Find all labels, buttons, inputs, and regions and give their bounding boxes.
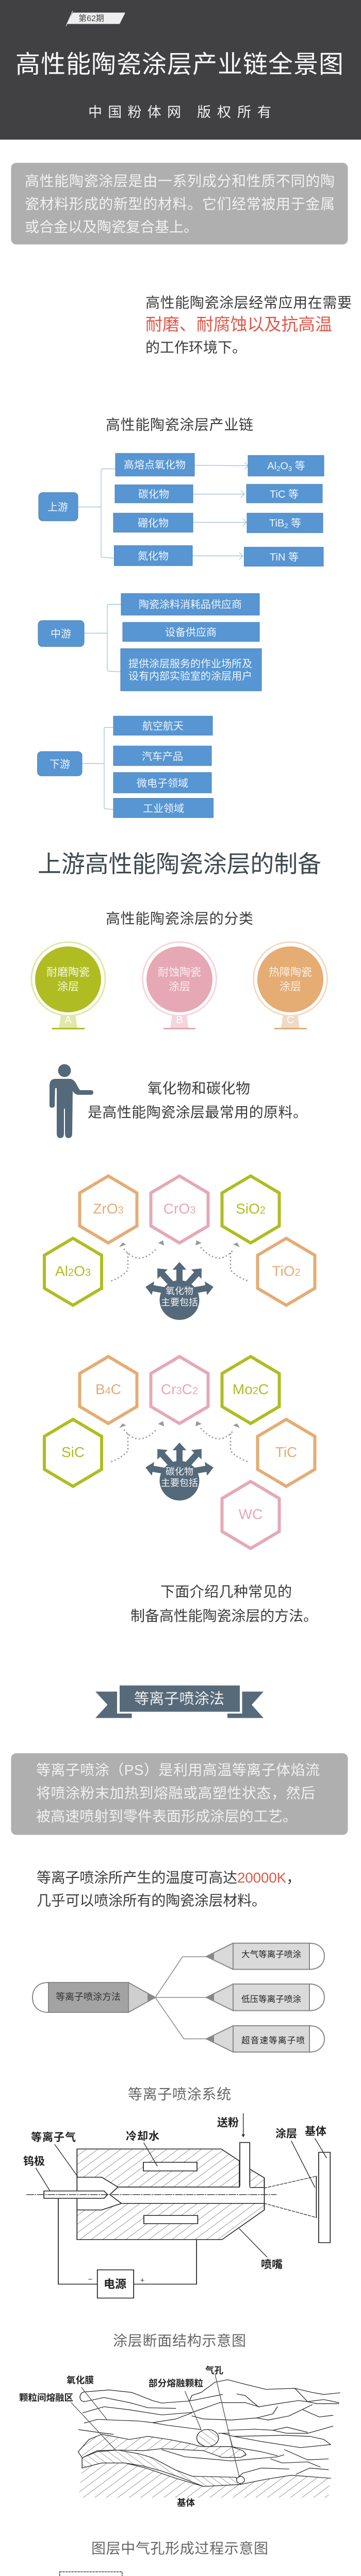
badge: corrosion-resistant: B xyxy=(176,1014,183,1026)
TiB2: 2 xyxy=(284,522,288,530)
plasma spraying panel: 等离子喷涂（PS）是利用高温等离子体焰流 xyxy=(36,1762,320,1778)
subtitle: 中国粉体网 xyxy=(88,105,181,120)
TiN xyxy=(244,547,323,566)
TiC xyxy=(247,484,322,503)
hex Al2O3: Al2O3 xyxy=(55,1263,91,1279)
consumable supplier: 陶瓷涂料消耗品供应商 xyxy=(139,599,242,611)
connectors xyxy=(84,604,121,672)
diagram: pore formation xyxy=(11,2572,350,2576)
midstream node xyxy=(38,620,84,647)
badge: thermal barrier: 涂层 xyxy=(280,981,301,993)
hex SiC: SiC xyxy=(61,1444,85,1460)
boride: 硼化物 xyxy=(138,517,169,529)
diagram: plasma spray system: 冷却水 xyxy=(126,2131,159,2142)
diagram: plasma spray system: 钨极 xyxy=(23,2156,45,2167)
Al2O3: 3 xyxy=(288,465,292,472)
hex Cr3C2 xyxy=(151,1357,208,1423)
hex Cr3C2: Cr3C2 xyxy=(161,1381,198,1397)
node: low pressure xyxy=(206,1984,324,2011)
intro panel: 高性能陶瓷涂层是由一系列成分和性质不同的陶 xyxy=(25,173,335,189)
oxide xyxy=(116,453,194,476)
midstream node: 中游 xyxy=(51,628,71,640)
badge: wear-resistant: 耐磨陶瓷 xyxy=(46,967,90,978)
TiB2: TiB xyxy=(269,518,284,529)
badge: thermal barrier xyxy=(254,942,327,1029)
plasma spraying panel: 被高速喷射到零件表面形成涂层的工艺。 xyxy=(36,1808,297,1824)
hex TiO2 xyxy=(258,1239,315,1306)
automotive: 汽车产品 xyxy=(142,751,183,762)
Al2O3: 2 xyxy=(276,465,280,472)
diagram: plasma spray system: 电源 xyxy=(104,2278,126,2291)
hex TiC: TiC xyxy=(275,1444,297,1460)
badge: wear-resistant: 涂层 xyxy=(57,981,79,993)
diagram: coating cross-section: 部分熔融颗粒 xyxy=(149,2378,203,2388)
hub: oxides: 主要包括 xyxy=(161,1297,198,1308)
hex B4C: B4C xyxy=(95,1381,121,1397)
diagram: plasma spray system xyxy=(23,2113,330,2298)
hex Mo2C: Mo2C xyxy=(233,1381,269,1397)
oxide hexagons xyxy=(44,1176,315,1320)
issue tag xyxy=(66,11,125,26)
raw materials text: 是高性能陶瓷涂层最常用的原料。 xyxy=(88,1105,307,1120)
coating service xyxy=(121,649,261,691)
industrial: 工业领域 xyxy=(143,803,184,815)
hex WC xyxy=(222,1482,280,1549)
Al2O3: Al xyxy=(267,461,276,472)
hub: oxides: 氧化物 xyxy=(166,1286,193,1296)
equipment supplier: 设备供应商 xyxy=(165,626,217,638)
badge: corrosion-resistant: 耐蚀陶瓷 xyxy=(158,967,201,978)
carbide: 碳化物 xyxy=(138,488,169,500)
consumable supplier xyxy=(121,594,259,615)
intro panel: 或合金以及陶瓷复合基上。 xyxy=(25,219,198,235)
application text: 耐磨、耐腐蚀以及抗高温 xyxy=(145,315,332,334)
method intro text xyxy=(130,1584,318,1624)
carbide xyxy=(115,485,193,503)
hex TiC xyxy=(258,1419,315,1486)
downstream node: 下游 xyxy=(50,758,70,770)
upstream node: 上游 xyxy=(47,501,68,513)
diagram: plasma spray system: 送粉 xyxy=(217,2117,239,2129)
hex SiC xyxy=(44,1419,102,1486)
Al2O3: O xyxy=(280,461,288,472)
ribbon: plasma spraying: 等离子喷涂法 xyxy=(134,1690,224,1707)
node: atmospheric: 大气等离子喷涂 xyxy=(241,1950,301,1959)
diagram: coating cross-section: 氧化膜 xyxy=(67,2375,94,2385)
diagram: coating cross-section: 气孔 xyxy=(205,2365,223,2376)
diagram: plasma spray system: − xyxy=(88,2275,93,2284)
chart: upstream xyxy=(39,453,324,566)
hex SiO2: SiO2 xyxy=(236,1200,266,1217)
TiB2 xyxy=(247,513,323,533)
TiN: TiN 等 xyxy=(270,551,299,563)
industrial xyxy=(113,799,214,818)
microelectronics: 微电子领域 xyxy=(137,777,188,789)
main node xyxy=(32,1982,155,2012)
method intro text: 下面介绍几种常见的 xyxy=(160,1584,292,1600)
automotive xyxy=(113,746,211,766)
badge: thermal barrier: C xyxy=(287,1014,294,1026)
hex Mo2C xyxy=(222,1357,280,1423)
TiB2: 等 xyxy=(288,517,301,529)
diagram: plasma spray system: 喷嘴 xyxy=(261,2259,283,2271)
node: supersonic xyxy=(206,2026,324,2052)
hub: oxides xyxy=(144,1262,215,1320)
heading: coating cross-section: 涂层断面结构示意图 xyxy=(113,2333,246,2349)
diagram: plasma spray system: 涂层 xyxy=(275,2128,297,2140)
diagram: plasma spray system: 等离子气 xyxy=(31,2131,76,2143)
icon: person xyxy=(50,1064,93,1138)
application text: 高性能陶瓷涂层经常应用在需要 xyxy=(145,295,352,311)
badge: thermal barrier: 热障陶瓷 xyxy=(269,967,312,978)
hex TiO2: TiO2 xyxy=(272,1263,301,1279)
aerospace: 航空航天 xyxy=(142,720,184,732)
coating service: 提供涂层服务的作业场所及 xyxy=(128,658,252,670)
temperature text: 几乎可以喷涂所有的陶瓷涂层材料。 xyxy=(37,1893,266,1908)
oxide: 高熔点氧化物 xyxy=(124,459,186,471)
hex WC: WC xyxy=(239,1506,262,1522)
hub: carbides: 主要包括 xyxy=(161,1478,198,1488)
node: supersonic: 超音速等离子喷 xyxy=(241,2036,305,2045)
connectors xyxy=(155,1957,206,2039)
hub: carbides xyxy=(144,1443,215,1500)
badge: corrosion-resistant xyxy=(142,942,217,1029)
Al2O3 xyxy=(248,455,324,476)
boride xyxy=(113,513,193,532)
aerospace xyxy=(113,716,212,735)
hex ZrO3: ZrO3 xyxy=(93,1200,124,1217)
badge: wear-resistant xyxy=(31,942,105,1029)
hex SiO2 xyxy=(222,1176,280,1243)
intro panel: 瓷材料形成的新型的材料。它们经常被用于金属 xyxy=(25,196,335,212)
section heading: upstream preparation: 上游高性能陶瓷涂层的制备 xyxy=(38,851,321,877)
plasma spraying panel: 将喷涂粉末加热到熔融或高塑性状态，然后 xyxy=(36,1785,315,1801)
diagram: coating cross-section: 基体 xyxy=(177,2498,195,2508)
node: low pressure: 低压等离子喷涂 xyxy=(241,1994,301,2004)
issue tag: 第62期 xyxy=(78,14,104,23)
diagram: plasma spray system: + xyxy=(140,2276,145,2285)
chart: plasma spraying methods xyxy=(32,1943,324,2052)
application text: 的工作环境下。 xyxy=(145,340,247,355)
diagram: coating cross-section xyxy=(19,2365,340,2508)
TiC: TiC 等 xyxy=(270,488,299,500)
application text xyxy=(145,295,352,355)
raw materials text xyxy=(88,1080,307,1120)
subtitle: 版权所有 xyxy=(197,105,271,120)
hex CrO3 xyxy=(151,1176,208,1243)
nitride: 氮化物 xyxy=(138,550,169,562)
raw materials text: 氧化物和碳化物 xyxy=(147,1080,250,1096)
diagram: plasma spray system: 基体 xyxy=(305,2126,326,2138)
connectors xyxy=(82,727,113,809)
plasma spraying panel xyxy=(11,1753,348,1835)
hex ZrO3 xyxy=(79,1176,137,1243)
chart: downstream xyxy=(38,716,213,818)
temperature text: 等离子喷涂所产生的温度可高达20000K， xyxy=(37,1870,301,1886)
main node: 等离子喷涂方法 xyxy=(56,1992,121,2002)
hub: carbides: 碳化物 xyxy=(166,1466,193,1477)
heading: plasma spray system: 等离子喷涂系统 xyxy=(128,2087,231,2102)
Al2O3: 等 xyxy=(292,460,305,472)
dotted arrows xyxy=(110,1240,250,1281)
diagram: coating cross-section: 颗粒间熔融区 xyxy=(19,2393,73,2403)
heading: pore formation: 图层中气孔形成过程示意图 xyxy=(91,2540,268,2556)
temperature text xyxy=(37,1870,301,1908)
header banner xyxy=(0,0,361,140)
heading: industry chain: 高性能陶瓷涂层产业链 xyxy=(106,417,253,433)
microelectronics xyxy=(113,773,211,793)
intro panel xyxy=(11,163,348,244)
subtitle xyxy=(88,105,271,120)
coating service: 设有内部实验室的涂层用户 xyxy=(128,670,252,682)
badge: corrosion-resistant: 涂层 xyxy=(169,981,190,993)
hex B4C xyxy=(79,1357,137,1423)
ribbon: plasma spraying xyxy=(95,1686,264,1718)
upstream node xyxy=(39,493,78,521)
node: atmospheric xyxy=(206,1943,324,1969)
method intro text: 制备高性能陶瓷涂层的方法。 xyxy=(130,1608,318,1624)
hex CrO3: CrO3 xyxy=(163,1200,195,1217)
nitride xyxy=(114,546,192,566)
dotted arrows xyxy=(110,1421,250,1462)
connectors xyxy=(78,462,248,560)
title: 高性能陶瓷涂层产业链全景图 xyxy=(15,51,343,78)
heading: classification: 高性能陶瓷涂层的分类 xyxy=(106,911,253,926)
equipment supplier xyxy=(123,622,259,641)
hex Al2O3 xyxy=(44,1239,102,1306)
downstream node xyxy=(38,752,82,776)
carbide hexagons xyxy=(44,1357,315,1549)
badge: wear-resistant: A xyxy=(64,1014,72,1026)
chart: midstream xyxy=(38,594,261,691)
